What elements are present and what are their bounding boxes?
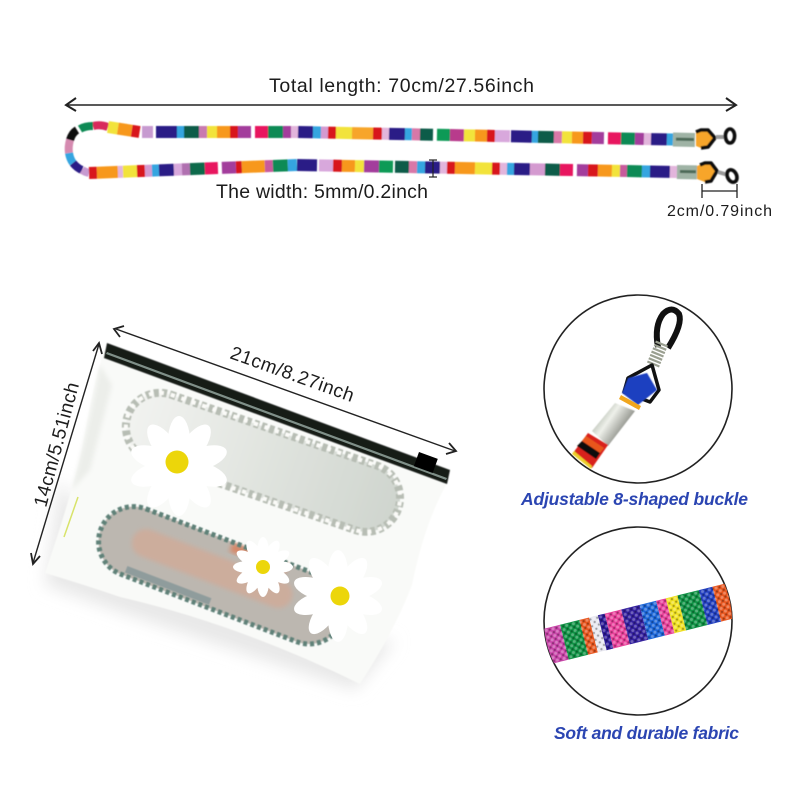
small daisy	[233, 537, 293, 597]
strap top lead-in	[107, 121, 141, 138]
strap top left run	[142, 126, 298, 138]
medium daisy	[291, 550, 385, 642]
pouch body	[45, 350, 450, 684]
strap end	[572, 433, 608, 469]
top buckle	[696, 129, 735, 148]
strap bottom left run	[89, 159, 297, 179]
pouch height arrow	[31, 343, 102, 564]
pouch	[45, 343, 450, 690]
width marker	[429, 160, 437, 177]
buckle length label: 2cm/0.79inch	[667, 203, 772, 220]
detail circle: fabric	[536, 527, 745, 715]
detail circle: buckle	[544, 295, 732, 483]
caption: buckle: Adjustable 8-shaped buckle	[520, 489, 748, 509]
rubber loop	[657, 310, 680, 348]
total length label: Total length: 70cm/27.56inch	[269, 75, 534, 97]
lower strap loop	[88, 496, 354, 654]
pouch left haze	[72, 365, 112, 490]
upper strap loop	[117, 384, 409, 541]
width label: The width: 5mm/0.2inch	[216, 181, 428, 203]
strap bottom right run	[297, 158, 697, 179]
zipper pull	[414, 452, 438, 473]
zipper highlight	[106, 352, 447, 480]
buckle length bracket	[702, 184, 737, 198]
pouch yellow mark	[64, 497, 78, 537]
pouch width arrow	[114, 326, 456, 454]
eight-shaped ring	[624, 365, 659, 402]
pouch height label: 14cm/5.51inch	[31, 380, 84, 509]
woven band	[544, 584, 732, 664]
zipper	[104, 343, 450, 484]
pouch shadow	[45, 480, 395, 690]
strap top right run	[298, 125, 695, 147]
large daisy	[128, 416, 230, 516]
total length arrow	[66, 98, 736, 111]
bottom buckle	[697, 163, 739, 184]
spring coil	[653, 343, 662, 365]
caption: fabric: Soft and durable fabric	[554, 723, 739, 743]
colorful strap	[69, 121, 739, 184]
blue thread block	[622, 373, 657, 405]
orange band	[619, 395, 641, 410]
pouch width label: 21cm/8.27inch	[227, 343, 357, 407]
metal tube	[592, 403, 635, 446]
strap curved end	[69, 125, 108, 173]
